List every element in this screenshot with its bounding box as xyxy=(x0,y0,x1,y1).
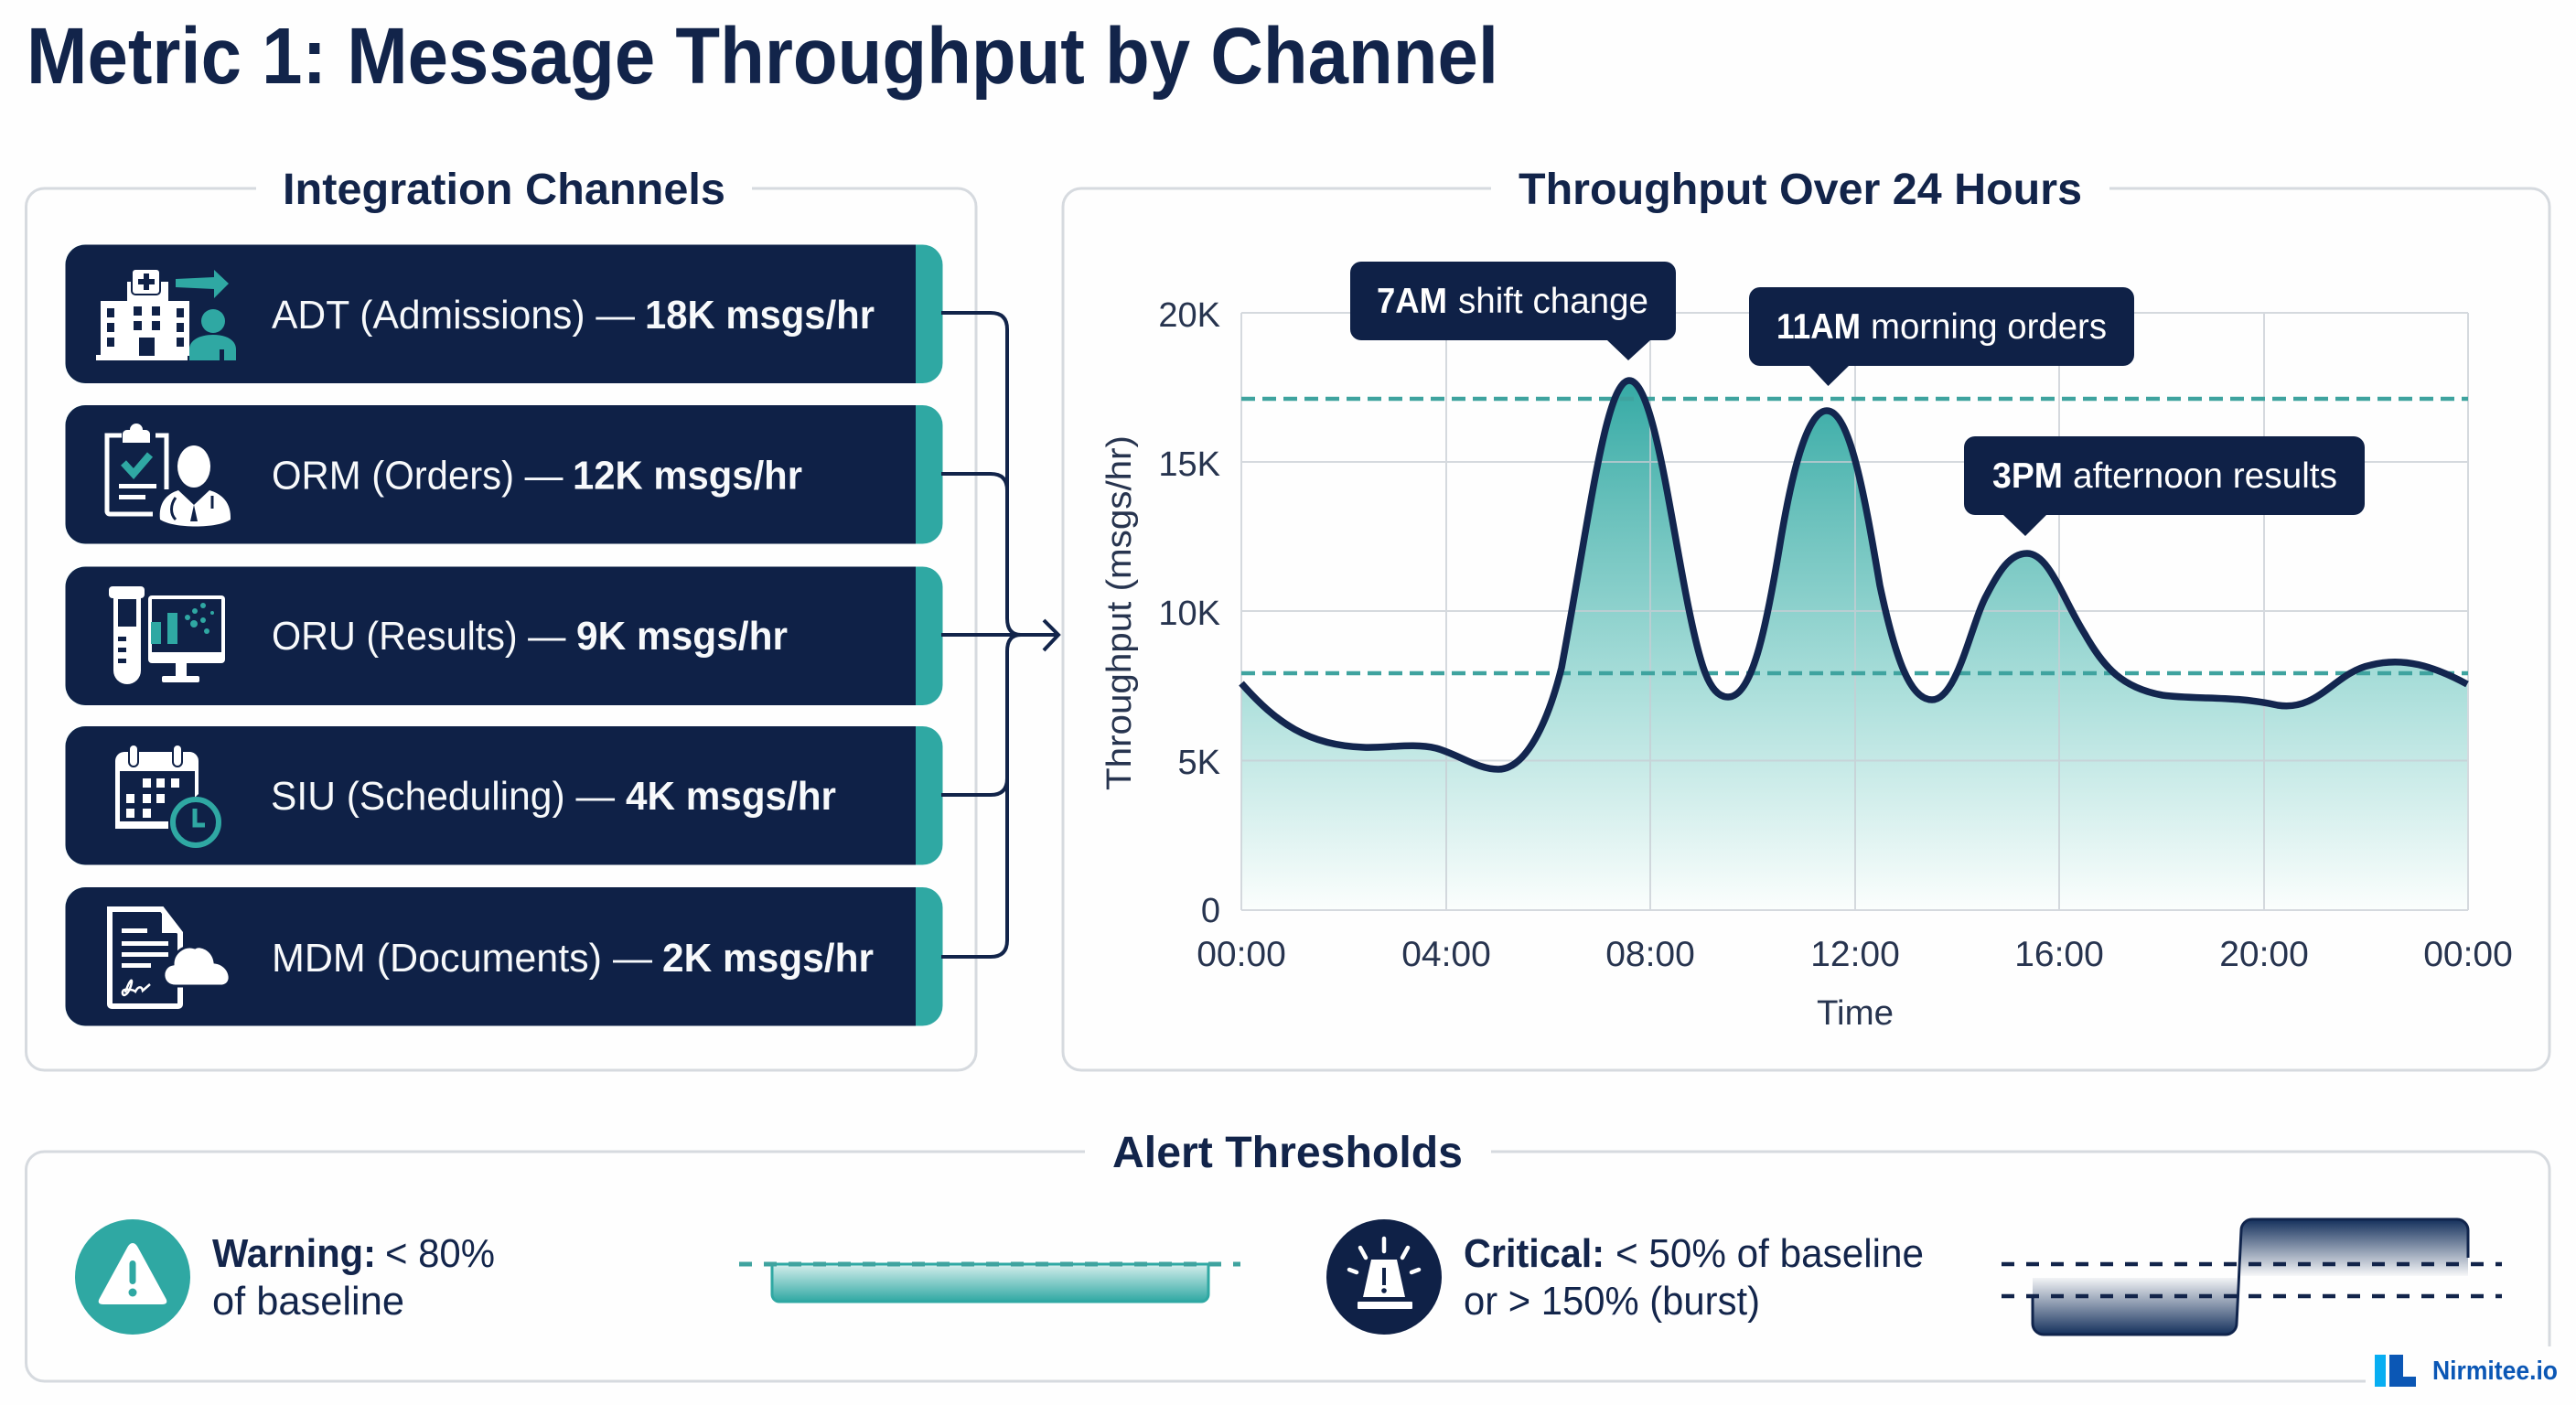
channel label: ADT xyxy=(272,293,875,338)
panel: throughput over 24 hours xyxy=(1063,166,2549,1070)
icon: critical siren xyxy=(1326,1219,1442,1335)
icon: hospital and patient xyxy=(96,269,236,360)
callout: 7AM shift change: 7AM xyxy=(1377,282,1447,321)
critical text: Critical: xyxy=(1464,1231,1605,1276)
critical text xyxy=(1464,1231,1924,1324)
x axis labels: 16:00 xyxy=(2014,935,2104,974)
critical text: < 50% of baseline xyxy=(1615,1231,1924,1276)
channel label: MDM: MDM (Documents) — xyxy=(272,936,652,981)
icon: warning triangle xyxy=(75,1219,190,1335)
y axis labels: 20K xyxy=(1158,296,1220,335)
icon: clipboard and doctor xyxy=(107,424,231,527)
x axis labels xyxy=(1197,935,2513,974)
panel border xyxy=(26,188,976,1070)
y axis labels xyxy=(1158,296,1220,930)
channel label: ORU: 9K msgs/hr xyxy=(576,614,788,659)
y axis title: Throughput (msgs/hr) xyxy=(1100,435,1139,790)
channel row: SIU xyxy=(66,726,942,865)
callout: 3PM afternoon results xyxy=(1964,436,2365,536)
channel label: ORM: 12K msgs/hr xyxy=(573,454,802,498)
channel label: ORM xyxy=(272,454,802,498)
callout: 11AM morning orders: morning orders xyxy=(1871,307,2107,347)
heading: throughput over 24 hours: Throughput Over 24 Hours xyxy=(1519,166,2082,214)
channel label: SIU xyxy=(271,774,836,819)
logo: Nirmitee.io: Nirmitee.io xyxy=(2432,1357,2558,1386)
callout: 7AM shift change xyxy=(1350,262,1676,360)
x axis labels: 00:00 xyxy=(1197,935,1286,974)
warning text: of baseline xyxy=(212,1279,404,1324)
channel label: ADT: 18K msgs/hr xyxy=(645,293,875,338)
x axis labels: 12:00 xyxy=(1810,935,1900,974)
panel: alert thresholds xyxy=(26,1129,2549,1381)
x axis labels: 04:00 xyxy=(1401,935,1491,974)
x axis labels: 20:00 xyxy=(2219,935,2309,974)
y axis labels: 0 xyxy=(1201,892,1220,930)
channel row: ORM xyxy=(66,405,942,543)
channel label: SIU: 4K msgs/hr xyxy=(626,774,836,819)
channel row: ORU xyxy=(66,567,942,705)
warning threshold graphic xyxy=(739,1264,1240,1302)
callout: 3PM afternoon results: 3PM xyxy=(1992,456,2063,496)
channel label: MDM xyxy=(272,936,874,981)
channel label: ORU xyxy=(272,614,788,659)
x axis labels: 08:00 xyxy=(1605,935,1695,974)
title: Metric 1: Message Throughput by Channel xyxy=(27,12,1498,101)
logo: Nirmitee.io xyxy=(2366,1346,2576,1392)
x axis title: Time xyxy=(1817,994,1894,1033)
arrow: channels merge into chart xyxy=(941,313,1058,957)
heading: integration channels: Integration Channels xyxy=(283,166,725,214)
warning text xyxy=(212,1231,495,1324)
heading: alert thresholds: Alert Thresholds xyxy=(1112,1129,1463,1177)
channel label: ORU: ORU (Results) — xyxy=(272,614,565,659)
icon: calendar and clock xyxy=(115,745,219,845)
critical text: or > 150% (burst) xyxy=(1464,1279,1760,1324)
y axis labels: 15K xyxy=(1158,445,1220,484)
critical threshold graphic xyxy=(2002,1219,2502,1335)
chart line xyxy=(1241,381,2467,769)
threshold lines xyxy=(1241,399,2468,673)
y axis labels: 5K xyxy=(1178,744,1220,782)
panel: integration channels xyxy=(26,166,976,1070)
callout: 11AM morning orders xyxy=(1749,287,2134,386)
x axis labels: 00:00 xyxy=(2423,935,2513,974)
icon: test tube and monitor xyxy=(109,586,225,684)
panel border xyxy=(1063,188,2549,1070)
chart fill xyxy=(1241,381,2467,910)
channel row: MDM xyxy=(66,887,942,1026)
area line chart xyxy=(1100,296,2513,1033)
channel label: ORM: ORM (Orders) — xyxy=(272,454,564,498)
callout: 7AM shift change: shift change xyxy=(1458,282,1648,321)
icon: document and cloud xyxy=(110,909,230,1006)
warning text: Warning: xyxy=(212,1231,376,1276)
callout: 11AM morning orders: 11AM xyxy=(1776,307,1861,347)
warning text: < 80% xyxy=(385,1231,495,1276)
channel label: SIU: SIU (Scheduling) — xyxy=(271,774,615,819)
panel border xyxy=(26,1152,2549,1381)
channel row: ADT xyxy=(66,245,942,383)
y axis labels: 10K xyxy=(1158,595,1220,633)
callout: 3PM afternoon results: afternoon results xyxy=(2073,456,2337,496)
channel label: MDM: 2K msgs/hr xyxy=(662,936,874,981)
channel label: ADT: ADT (Admissions) — xyxy=(272,293,635,338)
